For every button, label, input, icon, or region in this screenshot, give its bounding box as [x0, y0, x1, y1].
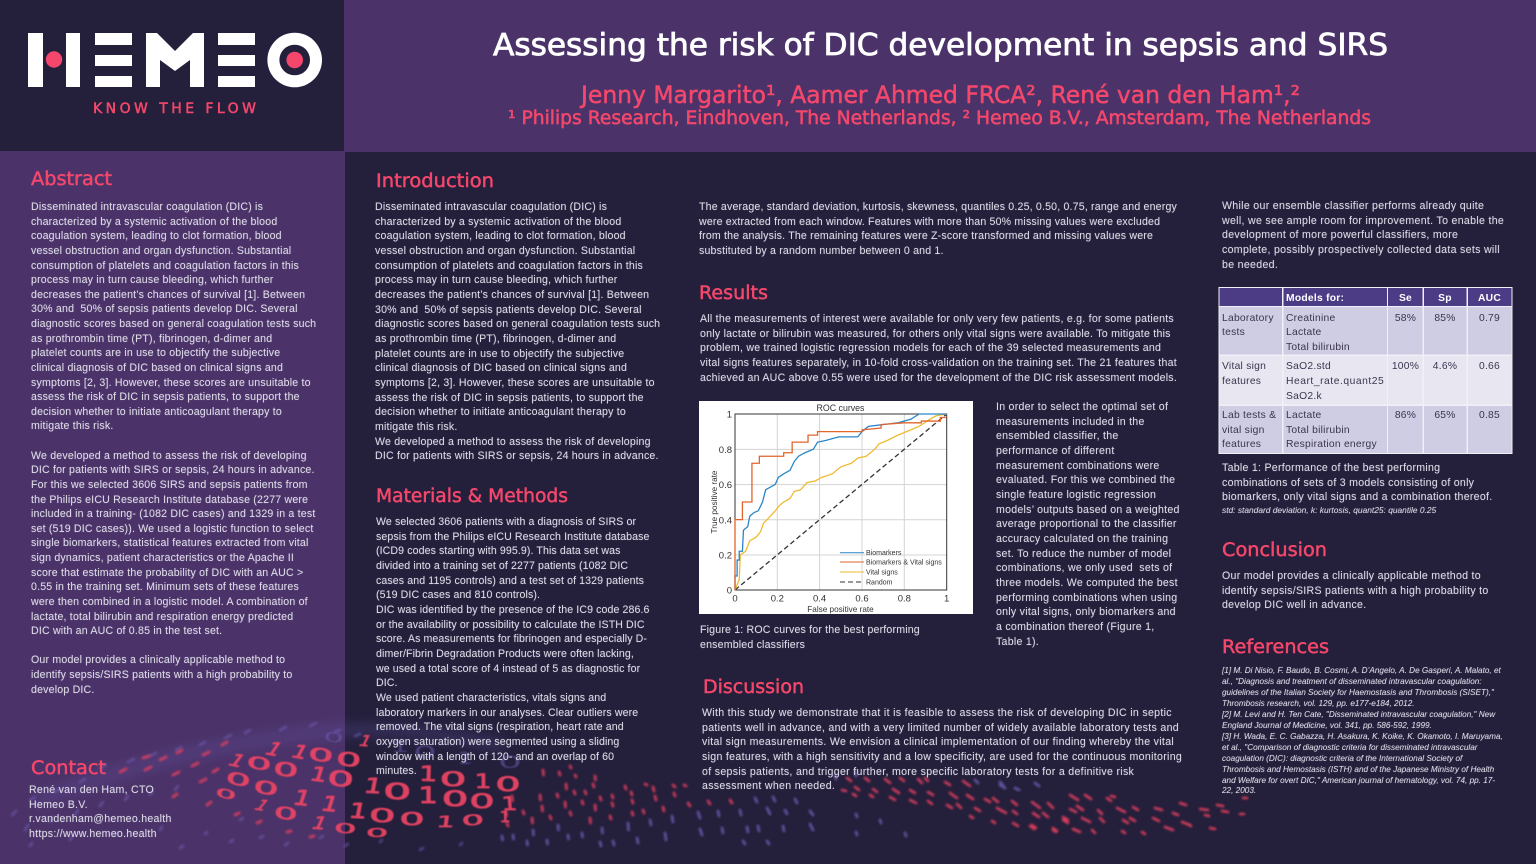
- decorative binary data wave: 0: [399, 809, 425, 830]
- decorative binary data wave: 0: [335, 748, 362, 772]
- decorative binary data wave: 1: [307, 762, 331, 787]
- conclusion text: Our model provides a clinically applicable method to identify sepsis/SIRS patients with a high probability to develop DIC well in advance.: [1222, 570, 1489, 611]
- decorative binary data wave: 1: [457, 749, 473, 768]
- legend: Biomarkers & Vital signs: [866, 560, 942, 566]
- y axis tick labels: 1: [727, 410, 732, 420]
- materials and methods text: We selected 3606 patients with a diagnosis of SIRS or sepsis from the Philips eICU Research Institute database (ICD9 codes starting with 995.9). This data set was divided into a training set of 2277 patients (1082 DIC cases and 1195 controls) and a test set of 1329 patients (519 DIC cases and 810 controls). DIC was identified by the presence of the IC9 code 286.6 or the availability or possibility to calculate the ISTH DIC score. As measurements for fibrinogen and especially D- dimer/Fibrin Degradation Products were often lacking, we used a total score of 4 instead of 5 as diagnostic for DIC. We used patient characteristics, vitals signs and laboratory markers in our analyses. Clear outliers were removed. The vital signs (respiration, heart rate and oxygen saturation) were segmented using a sliding window with a length of 120- and an overlap of 60 minutes.: [376, 516, 650, 777]
- row: vital sign features: 100%: [1392, 361, 1419, 372]
- row: lab tests and vital sign features: Respiration energy: [1286, 439, 1378, 450]
- heading: abstract: Abstract: [31, 169, 112, 190]
- logo: HEMEO know the flow: [28, 33, 322, 117]
- row: laboratory tests: 58%: [1395, 313, 1416, 324]
- decorative binary data wave: 0: [252, 777, 280, 801]
- curve: random: [735, 414, 947, 590]
- decorative binary data wave: 1: [499, 808, 511, 826]
- y axis tick labels: 0.2: [719, 550, 732, 562]
- row: lab tests and vital sign features: features: [1222, 439, 1261, 450]
- table header: [1286, 293, 1501, 304]
- table header: Se: [1399, 293, 1412, 304]
- decorative binary data wave: 1: [418, 783, 438, 809]
- row: laboratory tests: Lactate: [1286, 327, 1322, 338]
- table header: Models for:: [1286, 293, 1344, 304]
- decorative binary data wave: 1: [435, 814, 456, 831]
- decorative binary data wave: 0: [498, 753, 522, 772]
- row: lab tests and vital sign features: 65%: [1434, 410, 1456, 421]
- row: vital sign features: [1222, 361, 1500, 402]
- table header: AUC: [1478, 293, 1501, 304]
- x axis tick labels: 0.8: [898, 594, 911, 604]
- decorative binary data wave: 1: [223, 750, 251, 771]
- decorative binary data wave: 0: [366, 826, 388, 840]
- heading: conclusion: Conclusion: [1222, 540, 1327, 561]
- y axis tick labels: [719, 410, 732, 596]
- row: lab tests and vital sign features: Lactate: [1286, 410, 1322, 421]
- table abbreviations note: std: standard deviation, k: kurtosis, quant25: quantile 0.25: [1222, 505, 1436, 515]
- results text: All the measurements of interest were available for only very few patients, e.g. for some patients only lactate or bilirubin was measured, for others only vital signs were available. To mitigate this problem, we trained logistic regression models for each of the 39 selected measurements and vital signs features separately, in 10-fold cross-validation on the training set. The 21 features that achieved an AUC above 0.55 were used for the development of the DIC risk assessment models.: [700, 313, 1177, 384]
- decorative binary data wave: [12, 723, 1247, 850]
- decorative binary data wave: 1: [287, 742, 313, 764]
- x axis tick labels: 0.6: [855, 594, 869, 604]
- discussion text: With this study we demonstrate that it is feasible to assess the risk of developing DIC in septic patients well in advance, and with a very limited number of widely available laboratory tests and vital sign measurements. We envision a clinical implementation of our finding whereby the vital sign features, with a high sensitivity and a low specificity, are used for the continuous monitoring of sepsis patients, and trigger further, more specific laboratory tests for a definitive risk assessment when needed.: [702, 707, 1182, 792]
- methods continued text: The average, standard deviation, kurtosis, skewness, quantiles 0.25, 0.50, 0.75, range and energy were extracted from each window. Features with more than 50% missing values were excluded from the analysis. The remaining features were Z-score transformed and missing values were substituted by a random number between 0 and 1.: [699, 201, 1177, 257]
- y axis tick labels: 0.8: [719, 445, 732, 456]
- decorative binary data wave: 0: [214, 785, 238, 803]
- row: laboratory tests: Total bilirubin: [1286, 342, 1350, 353]
- x axis label: False positive rate: [807, 605, 874, 614]
- heading: materials and methods: Materials & Methods: [376, 486, 568, 507]
- decorative binary data wave: 0: [495, 773, 521, 796]
- row: vital sign features: 0.66: [1479, 361, 1500, 372]
- table header: Sp: [1438, 293, 1452, 304]
- legend: Random: [866, 580, 893, 586]
- row: vital sign features: features: [1222, 376, 1261, 387]
- row: laboratory tests: Laboratory: [1222, 313, 1274, 324]
- decorative binary data wave: 0: [245, 752, 273, 775]
- row: vital sign features: Heart_rate.quant25: [1286, 376, 1384, 387]
- decorative binary data wave: 1: [249, 797, 273, 815]
- results side text: In order to select the optimal set of measurements included in the ensembled classifier, the performance of different measurement combinations were evaluated. For this we combined the single feature logistic regression models’ outputs based on a weighted average proportional to the classifier accuracy calculated on the training set. To reduce the number of model combinations, we only used sets of three models. We computed the best performing combinations when using only vital signs, only biomarkers and a combination thereof (Figure 1, Table 1).: [996, 401, 1180, 648]
- contact details: René van den Ham, CTO Hemeo B.V. r.vandenham@hemeo.health https://www.hemeo.health: [29, 784, 172, 840]
- decorative binary data wave: 1: [318, 792, 342, 817]
- authors: Jenny Margarito¹, Aamer Ahmed FRCA², René van den Ham¹,²: [579, 81, 1300, 109]
- legend: [840, 550, 942, 586]
- decorative binary data wave: 0: [326, 765, 355, 792]
- row: vital sign features: 4.6%: [1433, 361, 1457, 372]
- decorative binary data wave: 0: [334, 821, 357, 837]
- decorative binary data wave: 0: [307, 744, 335, 767]
- logo: HEMEO know the flow: KNOW THE FLOW: [93, 101, 256, 117]
- abstract text: Disseminated intravascular coagulation (DIC) is characterized by a systemic activation of the blood coagulation system, leading to clot formation, blood vessel obstruction and organ dysfunction. Substantial consumption of platelets and coagulation factors in this process may in turn cause bleeding, which further decreases the patient’s chances of survival [1]. Between 30% and 50% of sepsis patients develop DIC. Several diagnostic scores based on general coagulation tests such as prothrombin time (PT), fibrinogen, d-dimer and platelet counts are in use to objectify the subjective clinical diagnosis of DIC based on clinical signs and symptoms [2, 3]. However, these scores are unsuitable to assess the risk of DIC in sepsis patients, to support the decision whether to initiate anticoagulant therapy to mitigate this risk. We developed a method to assess the risk of developing DIC for patients with SIRS or sepsis, 24 hours in advance. For this we selected 3606 SIRS and sepsis patients from the Philips eICU Research Institute database (2277 were included in a training- (1082 DIC cases) and 1329 in a test set (519 DIC cases)). We used a logistic function to select single biomarkers, statistical features extracted from vital sign dynamics, patient characteristics or the Apache II score that estimate the probability of DIC with an AUC > 0.55 in the training set. Minimum sets of these features were then combined in a logistic model. A combination of lactate, total bilirubin and respiration energy predicted DIC with an AUC of 0.85 in the test set. Our model provides a clinically applicable method to identify sepsis/SIRS patients with a high probability to develop DIC.: [31, 201, 316, 696]
- row: vital sign features: SaO2.k: [1286, 391, 1322, 402]
- chart title: ROC curves: [817, 403, 865, 413]
- decorative binary data wave: 1: [419, 762, 438, 786]
- decorative binary data wave: 0: [322, 729, 345, 747]
- heading: discussion: Discussion: [703, 677, 804, 698]
- curve: vital signs: [735, 414, 947, 590]
- row: lab tests and vital sign features: vital sign: [1222, 425, 1265, 436]
- decorative binary data wave: 0: [383, 779, 412, 805]
- improvement text: While our ensemble classifier performs already quite well, we see ample room for improvement. To enable the development of more powerful classifiers, more complete, possibly prospectively collected data sets will be needed.: [1222, 200, 1504, 271]
- introduction text: Disseminated intravascular coagulation (DIC) is characterized by a systemic activation of the blood coagulation system, leading to clot formation, blood vessel obstruction and organ dysfunction. Substantial consumption of platelets and coagulation factors in this process may in turn cause bleeding, which further decreases the patient’s chances of survival [1]. Between 30% and 50% of sepsis patients develop DIC. Several diagnostic scores based on general coagulation tests such as prothrombin time (PT), fibrinogen, d-dimer and platelet counts are in use to objectify the subjective clinical diagnosis of DIC based on clinical signs and symptoms [2, 3]. However, these scores are unsuitable to assess the risk of DIC in sepsis patients, to support the decision whether to initiate anticoagulant therapy to mitigate this risk. We developed a method to assess the risk of developing DIC for patients with SIRS or sepsis, 24 hours in advance.: [375, 201, 660, 462]
- heading: introduction: Introduction: [376, 171, 494, 192]
- decorative binary data wave: 1: [347, 799, 370, 823]
- decorative binary data wave: 0: [440, 768, 466, 791]
- row: laboratory tests: 0.79: [1479, 313, 1500, 324]
- y axis tick labels: 0.6: [719, 480, 732, 491]
- row: laboratory tests: 85%: [1434, 313, 1456, 324]
- row: laboratory tests: [1222, 313, 1500, 353]
- row: lab tests and vital sign features: 86%: [1395, 410, 1416, 421]
- row: lab tests and vital sign features: Total bilirubin: [1286, 425, 1350, 436]
- row: lab tests and vital sign features: [1222, 410, 1500, 450]
- row: lab tests and vital sign features: 0.85: [1479, 410, 1500, 421]
- decorative binary data wave: 1: [362, 774, 385, 798]
- decorative binary data wave: 0: [469, 790, 495, 813]
- heading: results: Results: [699, 283, 768, 304]
- decorative binary data wave: 1: [475, 769, 491, 793]
- decorative binary data wave: 0: [369, 804, 396, 827]
- y axis tick labels: 0: [727, 586, 732, 596]
- decorative binary data wave: 0: [273, 802, 299, 825]
- decorative binary data wave: 0: [224, 768, 252, 792]
- x axis tick labels: [732, 594, 949, 604]
- y axis tick labels: 0.4: [719, 515, 732, 526]
- decorative binary data wave: 0: [461, 812, 484, 829]
- x axis tick labels: 0.2: [771, 594, 784, 604]
- references list: [1] M. Di Nisio, F. Baudo, B. Cosmi, A. D’Angelo, A. De Gasperi, A. Malato, et al., "Diagnosis and treatment of disseminated intravascular coagulation: guidelines of the Italian Society for Haemostasis and Thrombosis (SISET)," Thrombosis research, vol. 129, pp. e177-e184, 2012. [2] M. Levi and H. Ten Cate, "Disseminated intravascular coagulation," New England Journal of Medicine, vol. 341, pp. 586-592, 1999. [3] H. Wada, E. C. Gabazza, H. Asakura, K. Koike, K. Okamoto, I. Maruyama, et al., "Comparison of diagnostic criteria for disseminated intravascular coagulation (DIC): diagnostic criteria of the International Society of Thrombosis and Hemostasis (ISTH) and of the Japanese Ministry of Health and Welfare for overt DIC," American journal of hematology, vol. 74, pp. 17- 22, 2003.: [1222, 666, 1503, 795]
- decorative binary data wave: 0: [272, 758, 300, 783]
- heading: contact: Contact: [31, 758, 106, 779]
- ROC chart figure: [699, 401, 973, 614]
- row: laboratory tests: Creatinine: [1286, 313, 1335, 324]
- row: vital sign features: SaO2.std: [1286, 361, 1331, 372]
- decorative binary data wave: 1: [290, 786, 314, 811]
- y axis label: True positive rate: [710, 470, 719, 533]
- x axis tick labels: 0.4: [813, 594, 826, 604]
- x axis tick labels: 0: [732, 594, 738, 604]
- decorative binary data wave: 1: [391, 739, 409, 756]
- heading: references: References: [1222, 637, 1329, 658]
- legend: Vital signs: [866, 570, 898, 576]
- decorative binary data wave: 0: [413, 743, 437, 762]
- curve: biomarkers and vital signs: [735, 418, 947, 590]
- x axis tick labels: 1: [944, 594, 949, 604]
- decorative binary data wave: 1: [260, 739, 287, 761]
- figure caption: Figure 1: ROC curves for the best performing ensembled classifiers: [700, 624, 920, 651]
- table of model performance: [1218, 287, 1512, 454]
- row: laboratory tests: tests: [1222, 327, 1245, 338]
- row: lab tests and vital sign features: Lab tests &: [1222, 410, 1276, 421]
- title: Assessing the risk of DIC development in sepsis and SIRS: [493, 28, 1388, 63]
- decorative binary data wave: 1: [501, 794, 518, 815]
- table caption: Table 1: Performance of the best performing combinations of sets of 3 models consisting of only biomarkers, only vital signs and a combination thereof.: [1222, 462, 1492, 503]
- legend: Biomarkers: [866, 550, 902, 557]
- decorative binary data wave: 0: [442, 786, 468, 811]
- decorative binary data wave: 1: [355, 732, 375, 751]
- row: vital sign features: Vital sign: [1222, 361, 1266, 372]
- curve: biomarkers: [735, 414, 947, 590]
- affiliations: ¹ Philips Research, Eindhoven, The Netherlands, ² Hemeo B.V., Amsterdam, The Netherlands: [508, 108, 1371, 129]
- decorative binary data wave: 1: [308, 813, 331, 834]
